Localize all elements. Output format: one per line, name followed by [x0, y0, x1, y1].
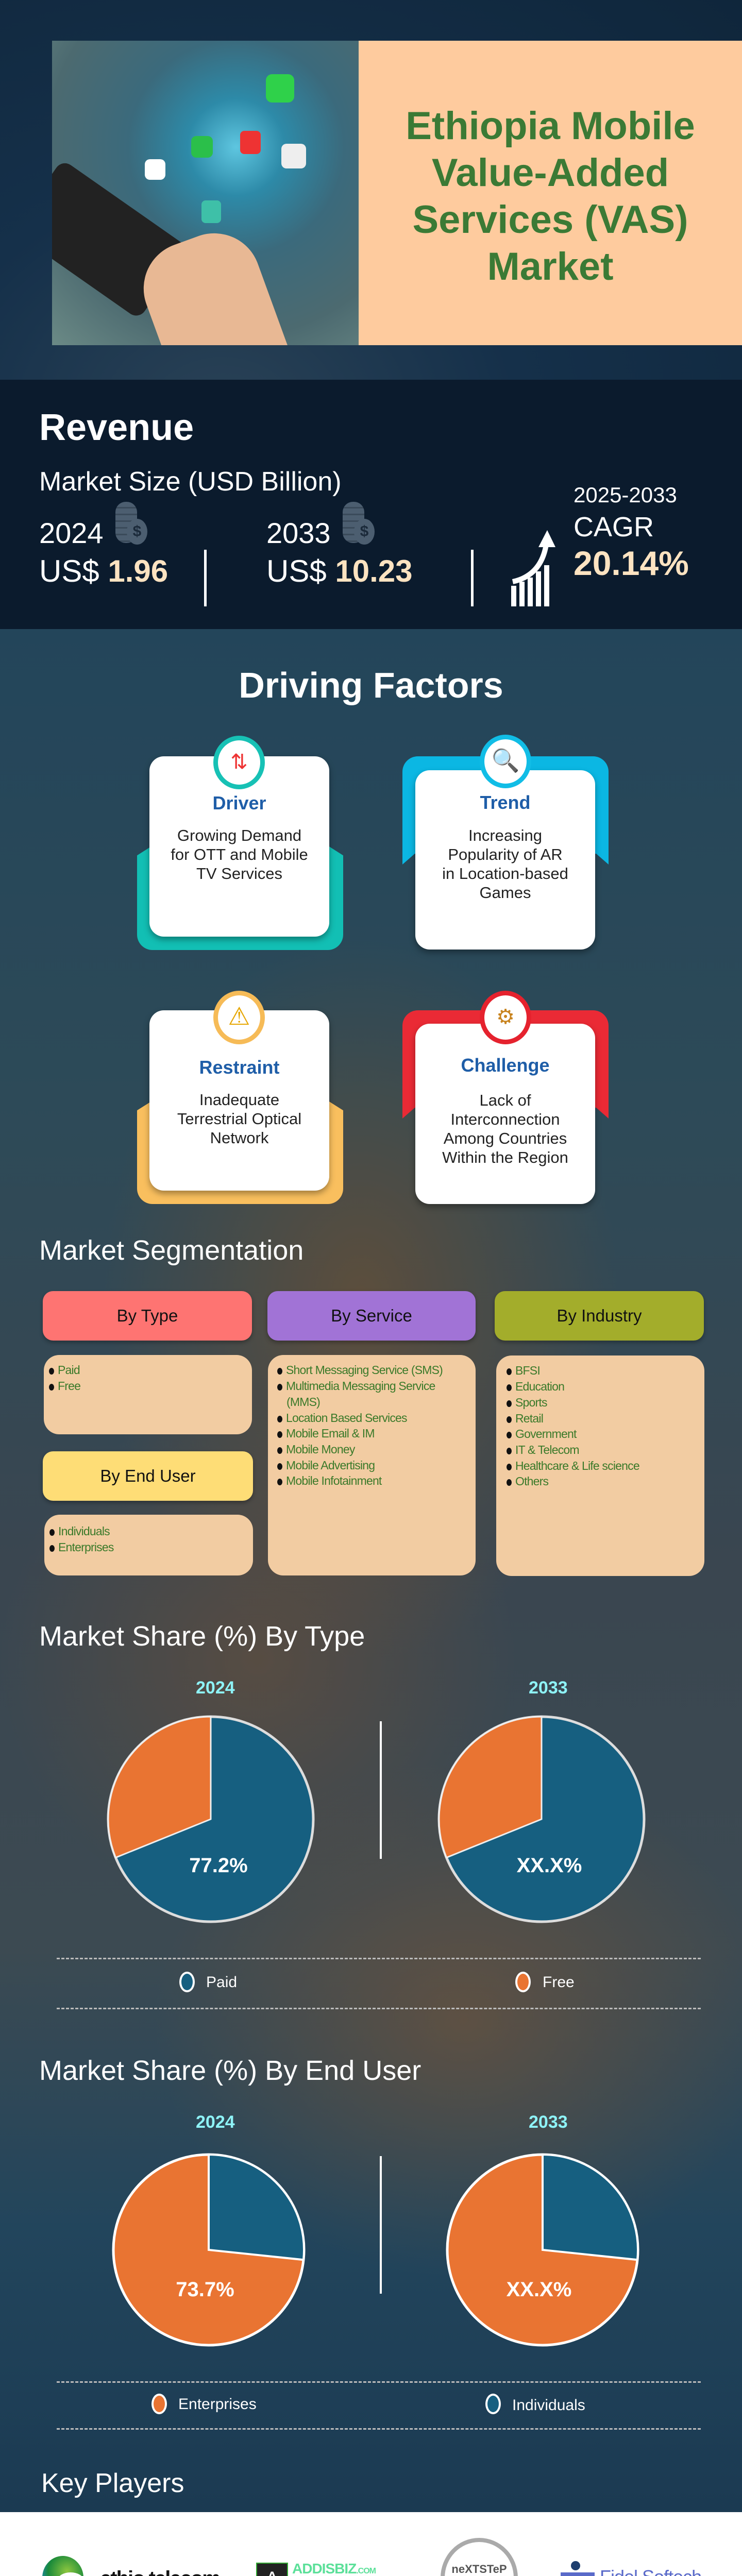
- 2024 value: [39, 502, 168, 588]
- segment: by end user: [43, 1451, 253, 1501]
- title panel: Ethiopia Mobile: [406, 104, 695, 148]
- CAGR: CAGR: [574, 512, 654, 543]
- 2024 value: $: [133, 523, 141, 540]
- pie chart: type 2033: [438, 1716, 645, 1923]
- background top: [0, 0, 742, 380]
- text: 2024: [196, 2112, 235, 2132]
- 2033 value: 2033: [266, 517, 331, 549]
- icon: warning: ⚠: [228, 1003, 250, 1030]
- logo: addisbiz: [256, 2561, 376, 2576]
- pie chart: end user 2024: 73.7%: [176, 2278, 234, 2301]
- heading: market segmentation: Market Segmentation: [39, 1235, 303, 1266]
- icon: challenge: [480, 991, 531, 1044]
- text: Education: [515, 1380, 564, 1393]
- icon: challenge: ⚙: [496, 1006, 515, 1028]
- revenue band: Revenue: [39, 407, 194, 448]
- 2033 value: US$ 10.23: [266, 554, 413, 588]
- hero image: [52, 41, 359, 345]
- panel: trend: [402, 735, 609, 954]
- heading: market share by end user: Market Share (%) By End User: [39, 2055, 421, 2086]
- legend: type: Paid: [206, 1974, 237, 1991]
- title panel: Services (VAS): [412, 198, 688, 242]
- panel: trend: Increasing: [468, 826, 542, 844]
- panel: trend: Popularity of AR: [448, 845, 563, 863]
- text: Sports: [515, 1396, 547, 1409]
- legend: end user: [151, 2394, 585, 2414]
- logo: fidel softech: [561, 2561, 701, 2576]
- panel: driver: for OTT and Mobile: [171, 845, 308, 863]
- CAGR: 20.14%: [574, 544, 689, 582]
- text: Short Messaging Service (SMS): [286, 1363, 443, 1377]
- icon: trend: [480, 735, 531, 788]
- panel: trend: Games: [480, 884, 531, 902]
- text: 2033: [529, 1678, 568, 1698]
- text: IT & Telecom: [515, 1443, 579, 1456]
- pie chart: end user 2033: XX.X%: [507, 2278, 571, 2301]
- text: Multimedia Messaging Service: [286, 1379, 435, 1393]
- segment: by type: By Type: [117, 1306, 178, 1325]
- panel: challenge: Challenge: [461, 1055, 550, 1076]
- icon: growth chart: [511, 530, 555, 606]
- text: (MMS): [286, 1395, 320, 1409]
- legend: type: [179, 1972, 575, 1992]
- pie chart: type 2024: 77.2%: [189, 1854, 248, 1877]
- text: Paid: [58, 1363, 80, 1377]
- heading: driving factors: Driving Factors: [239, 665, 503, 705]
- panel: driver: [137, 736, 343, 950]
- 2024 value: US$ 1.96: [39, 554, 168, 588]
- background middle photo: [0, 629, 742, 2512]
- segment: by type: [43, 1291, 252, 1341]
- logo: nextstep technology: [441, 2538, 518, 2576]
- CAGR: [574, 483, 689, 582]
- 2033 value: [266, 502, 413, 588]
- text: Location Based Services: [286, 1411, 407, 1425]
- panel: restraint: Restraint: [199, 1057, 280, 1078]
- panel: trend: Trend: [480, 792, 531, 813]
- text: Individuals: [58, 1524, 110, 1538]
- legend: type: Free: [543, 1974, 575, 1991]
- panel: challenge: Lack of: [480, 1091, 531, 1109]
- panel: restraint: Network: [210, 1129, 268, 1147]
- segment: by industry: [495, 1291, 704, 1341]
- revenue band: Market Size (USD Billion): [39, 467, 342, 497]
- segment: by service: [267, 1291, 476, 1341]
- text: Retail: [515, 1412, 543, 1425]
- title panel: Value-Added: [432, 151, 669, 195]
- panel: challenge: Interconnection: [450, 1110, 560, 1128]
- text: Enterprises: [58, 1540, 114, 1554]
- panel: challenge: Among Countries: [444, 1129, 567, 1147]
- panel: challenge: Within the Region: [442, 1148, 568, 1166]
- segment: by industry: By Industry: [556, 1306, 642, 1325]
- text: Mobile Infotainment: [286, 1474, 382, 1487]
- logo: nextstep technology: neXTSTeP: [451, 2563, 507, 2575]
- CAGR: 2025-2033: [574, 483, 677, 507]
- text: Free: [58, 1379, 80, 1393]
- panel: driver: Driver: [212, 792, 266, 814]
- text: Mobile Email & IM: [286, 1427, 375, 1440]
- 2033 value: $: [360, 523, 368, 540]
- text: Government: [515, 1427, 577, 1440]
- title panel: [359, 41, 742, 345]
- panel: restraint: Terrestrial Optical: [177, 1110, 301, 1128]
- logo: ethio telecom: [42, 2556, 220, 2576]
- panel: driver: Growing Demand: [177, 826, 301, 844]
- icon: driver: [213, 736, 265, 789]
- pie chart: end user 2024: [112, 2154, 305, 2346]
- panel: restraint: [137, 991, 343, 1204]
- icon: trend: 🔍: [492, 748, 519, 773]
- text: Others: [515, 1475, 548, 1488]
- segment: by service: By Service: [331, 1306, 412, 1325]
- text: 2033: [529, 2112, 568, 2132]
- title panel: Market: [487, 245, 613, 289]
- revenue band: [0, 380, 742, 629]
- heading: market share by type: Market Share (%) By Type: [39, 1621, 365, 1652]
- text: 2024: [196, 1678, 235, 1698]
- text: Mobile Advertising: [286, 1459, 375, 1472]
- heading: key players: Key Players: [41, 2468, 184, 2498]
- icon: driver: ⇅: [230, 751, 248, 773]
- icon: warning: [213, 991, 265, 1044]
- panel: driver: TV Services: [196, 865, 282, 883]
- panel: restraint: Inadequate: [199, 1091, 279, 1109]
- panel: key players logos: [0, 2512, 742, 2576]
- panel: trend: in Location-based: [442, 865, 568, 883]
- pie chart: type 2024: [107, 1716, 314, 1923]
- pie chart: type 2033: XX.X%: [517, 1854, 582, 1877]
- legend: end user: Individuals: [512, 2397, 585, 2414]
- pie chart: end user 2033: [446, 2154, 639, 2346]
- segment: by end user: By End User: [100, 1466, 196, 1485]
- text: Healthcare & Life science: [515, 1459, 639, 1472]
- text: Mobile Money: [286, 1443, 355, 1456]
- 2024 value: 2024: [39, 517, 104, 549]
- text: BFSI: [515, 1364, 540, 1377]
- panel: challenge: [402, 991, 609, 1209]
- legend: end user: Enterprises: [178, 2396, 257, 2413]
